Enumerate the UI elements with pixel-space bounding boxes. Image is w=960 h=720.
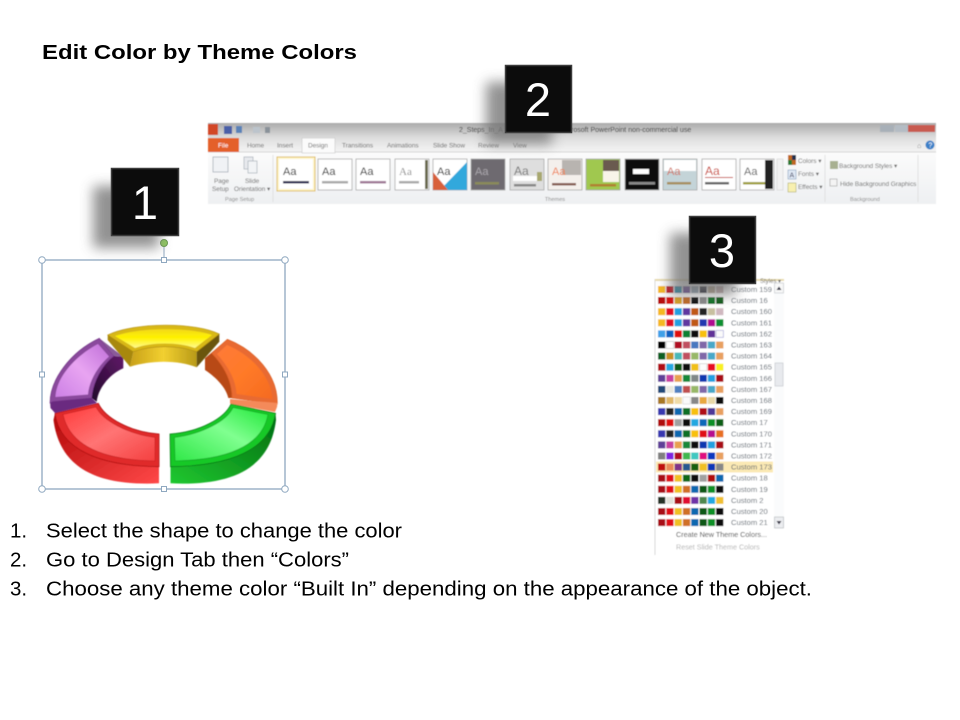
numbered tile 3: 3 xyxy=(709,224,735,277)
numbered tile 3 xyxy=(670,216,756,295)
theme thumbnails: Aa xyxy=(744,166,758,178)
colors, fonts, effects buttons: Effects ▾ xyxy=(798,184,822,191)
highlighted row xyxy=(656,462,773,472)
instruction list: 1. xyxy=(10,520,27,542)
numbered tile 1 xyxy=(93,168,179,248)
row labels: Custom 171 xyxy=(731,440,772,449)
numbered tile 2: 2 xyxy=(525,73,551,126)
ribbon tabs: View xyxy=(513,142,527,150)
segment: green xyxy=(170,404,276,484)
row labels xyxy=(731,285,772,527)
row labels: Custom 172 xyxy=(731,452,772,460)
instruction list: Go to Design Tab then “Colors” xyxy=(46,548,349,572)
colors, fonts, effects buttons: Colors ▾ xyxy=(798,158,821,165)
row labels: Custom 18 xyxy=(731,474,768,483)
ribbon tabs: Insert xyxy=(277,142,293,150)
window title: 2_Steps_In_A_Pr xyxy=(459,127,515,134)
background group xyxy=(830,155,918,203)
3D ring diagram xyxy=(50,325,278,484)
theme thumbnails: Aa xyxy=(514,164,529,178)
panel: theme colors dropdown: Styles ▾ xyxy=(760,279,781,285)
menu items xyxy=(676,530,767,552)
row labels: Custom 16 xyxy=(731,296,768,305)
ribbon tabs: Design xyxy=(308,142,328,150)
panel: PowerPoint ribbon screenshot: rosoft PowerPoint non-commercial use xyxy=(571,127,691,134)
selection frame xyxy=(39,240,288,492)
row labels: Custom 17 xyxy=(731,418,768,427)
background group: Hide Background Graphics xyxy=(840,181,916,188)
background group: Background Styles ▾ xyxy=(839,163,897,170)
instruction list: Choose any theme color “Built In” depending on the appearance of the object. xyxy=(46,578,812,600)
ribbon tabs: Animations xyxy=(387,142,419,150)
row labels: Custom 19 xyxy=(731,485,768,494)
row labels: Custom 170 xyxy=(731,429,772,438)
segment: red xyxy=(54,403,159,484)
theme thumbnails: Aa xyxy=(437,166,451,178)
row labels: Custom 159 xyxy=(731,285,772,294)
instruction list xyxy=(10,520,812,600)
colors, fonts, effects buttons xyxy=(788,155,825,202)
row labels: Custom 168 xyxy=(731,396,772,405)
segment: purple xyxy=(50,338,123,413)
numbered tile 1: 1 xyxy=(132,176,158,229)
page setup group xyxy=(212,155,273,203)
row labels: Custom 21 xyxy=(731,518,768,527)
ribbon tabs xyxy=(208,138,527,153)
menu items: Reset Slide Theme Colors xyxy=(676,542,760,552)
window controls: ? xyxy=(928,142,932,150)
page setup group: Page Setup xyxy=(225,197,254,203)
theme thumbnails: Aa xyxy=(322,166,336,178)
window controls xyxy=(880,125,935,150)
ribbon tabs: Slide Show xyxy=(433,142,465,150)
page setup group: Setup xyxy=(212,186,229,193)
theme thumbnails: Aa xyxy=(705,164,720,178)
row labels: Custom 161 xyxy=(731,318,772,327)
theme thumbnails: Themes xyxy=(545,197,565,203)
row labels: Custom 164 xyxy=(731,352,772,361)
numbered tile 2 xyxy=(486,65,572,144)
ribbon tabs: File xyxy=(218,142,229,150)
theme thumbnails: Aa xyxy=(667,166,681,178)
instruction list: Select the shape to change the color xyxy=(46,520,402,542)
row labels: Custom 165 xyxy=(731,363,772,372)
quick access toolbar xyxy=(208,124,270,135)
row labels: Custom 160 xyxy=(731,307,772,316)
theme thumbnails: Aa xyxy=(360,166,374,178)
panel: theme colors dropdown xyxy=(655,279,784,555)
row labels: Custom 162 xyxy=(731,329,772,338)
menu items: Create New Theme Colors... xyxy=(676,530,767,539)
page setup group: Orientation ▾ xyxy=(234,186,270,193)
background group: Background xyxy=(850,197,880,203)
page setup group: Slide xyxy=(245,178,260,185)
colors, fonts, effects buttons: Fonts ▾ xyxy=(798,171,819,178)
instruction list: 2. xyxy=(10,548,27,572)
ribbon tabs: Home xyxy=(247,142,264,150)
theme thumbnails: Aa xyxy=(552,166,566,178)
colors, fonts, effects buttons: A xyxy=(790,172,794,180)
row labels: Custom 169 xyxy=(731,407,772,416)
theme thumbnails: Aa xyxy=(399,166,412,178)
row labels: Custom 163 xyxy=(731,340,772,350)
panel: PowerPoint ribbon screenshot xyxy=(208,123,936,204)
ribbon tabs: Transitions xyxy=(342,142,373,150)
segment: yellow xyxy=(108,325,219,367)
row labels: Custom 2 xyxy=(731,496,764,505)
row labels: Custom 166 xyxy=(731,374,772,383)
scrollbar xyxy=(774,283,784,528)
swatch rows xyxy=(658,286,723,526)
theme thumbnails: Aa xyxy=(283,166,297,178)
page setup group: Page xyxy=(214,178,229,185)
row labels: Custom 20 xyxy=(731,507,768,516)
theme thumbnails xyxy=(277,157,783,203)
segment: orange xyxy=(205,339,278,412)
ribbon tabs: Review xyxy=(478,142,499,150)
theme thumbnails: Aa xyxy=(475,166,489,178)
title: Edit Color by Theme Colors xyxy=(42,41,357,64)
row labels: Custom 167 xyxy=(731,385,772,394)
row labels: Custom 173 xyxy=(731,463,772,472)
instruction list: 3. xyxy=(10,578,27,600)
window controls: ⌂ xyxy=(917,143,921,150)
